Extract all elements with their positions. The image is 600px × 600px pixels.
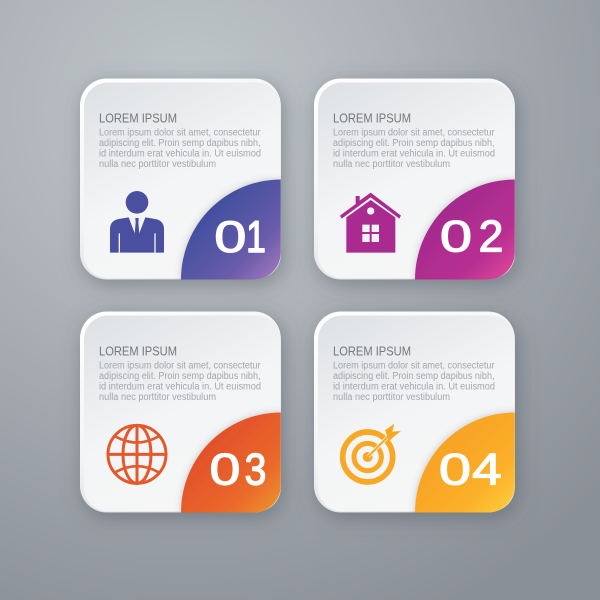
- corner arc 03: [178, 410, 281, 512]
- text block 02: Lorem ipsum dolor sit amet, consectetur: [333, 128, 495, 139]
- corner arc 01: [178, 176, 281, 280]
- number 04: [439, 444, 502, 494]
- number 03: 3: [245, 444, 266, 494]
- text block 02: [333, 128, 495, 170]
- text block 04: nulla nec porttitor vestibulum: [333, 392, 450, 403]
- text block 04: adipiscing elit. Proin semp dapibus nibh,: [333, 371, 494, 382]
- corner arc 04: [412, 410, 515, 512]
- text block 04: Lorem ipsum dolor sit amet, consectetur: [333, 361, 495, 372]
- text block 01: id interdum erat vehicula in. Ut euismod: [99, 148, 261, 160]
- icon: globe: [108, 425, 166, 483]
- icon: house: [340, 193, 401, 253]
- number 01: [214, 211, 266, 262]
- number 01: 0: [214, 211, 246, 261]
- icon: target with arrow: [343, 424, 401, 482]
- heading 01: LOREM IPSUM: [99, 112, 177, 126]
- card base 01: [80, 78, 281, 280]
- icon: businessman: [110, 191, 164, 253]
- number 01: 1: [246, 212, 266, 262]
- corner arc 02: [412, 176, 515, 280]
- card face 02: [318, 82, 515, 278]
- text block 03: [99, 361, 261, 403]
- panel: card 02: [306, 74, 526, 294]
- heading 02: LOREM IPSUM: [333, 112, 411, 126]
- text block 01: Lorem ipsum dolor sit amet, consectetur: [99, 128, 261, 139]
- card base 04: [314, 312, 515, 512]
- text block 04: [333, 361, 495, 403]
- panel: card 04: [308, 308, 526, 525]
- number 02: 0: [440, 211, 472, 261]
- number 03: [210, 444, 266, 494]
- number 02: 2: [479, 212, 503, 262]
- text block 03: adipiscing elit. Proin semp dapibus nibh,: [99, 371, 260, 382]
- number 04: 4: [472, 446, 502, 494]
- panel: card 03: [74, 307, 293, 526]
- text block 03: nulla nec porttitor vestibulum: [99, 392, 216, 403]
- heading 03: LOREM IPSUM: [99, 344, 177, 358]
- text block 04: id interdum erat vehicula in. Ut euismod: [333, 382, 495, 392]
- text block 02: adipiscing elit. Proin semp dapibus nibh,: [333, 138, 494, 149]
- text block 03: id interdum erat vehicula in. Ut euismod: [99, 382, 261, 392]
- text block 01: [99, 128, 261, 170]
- number 02: [440, 211, 503, 262]
- card face 01: [84, 82, 281, 278]
- text block 02: id interdum erat vehicula in. Ut euismod: [333, 148, 495, 160]
- text block 02: nulla nec porttitor vestibulum: [333, 159, 450, 170]
- card base 02: [314, 78, 515, 280]
- text block 01: nulla nec porttitor vestibulum: [99, 159, 216, 170]
- heading 04: LOREM IPSUM: [333, 344, 411, 358]
- card face 03: [84, 316, 281, 512]
- panel: card 01: [72, 72, 294, 294]
- number 04: 0: [439, 444, 471, 494]
- number 03: 0: [210, 444, 240, 494]
- text block 03: Lorem ipsum dolor sit amet, consectetur: [99, 361, 261, 372]
- card base 03: [80, 312, 281, 512]
- text block 01: adipiscing elit. Proin semp dapibus nibh,: [99, 138, 260, 149]
- card face 04: [318, 316, 515, 512]
